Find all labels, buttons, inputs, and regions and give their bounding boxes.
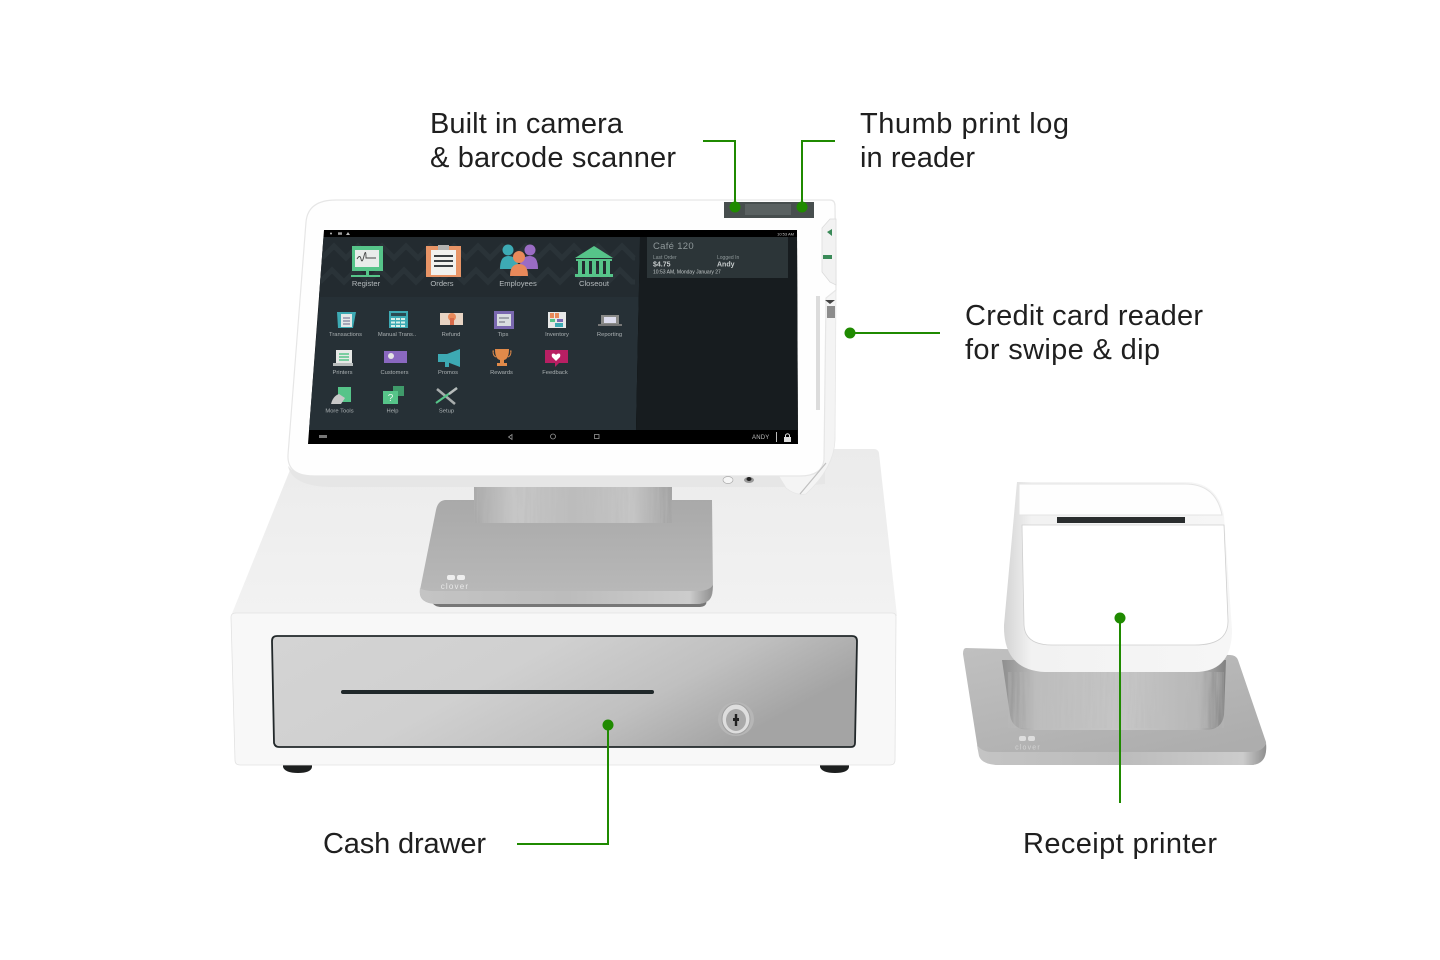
label: Credit card reader — [965, 300, 1203, 332]
info card: Andy — [717, 262, 735, 268]
callout: camera and barcode scanner — [430, 108, 740, 212]
printer white front — [1022, 525, 1228, 645]
app icon: reporting: Reporting — [597, 332, 622, 338]
drawer top surface — [231, 449, 897, 616]
app icon: register — [351, 246, 383, 288]
stand logo: clover — [441, 582, 469, 591]
right panel — [636, 237, 798, 430]
side buttons and reader slot — [800, 219, 836, 494]
monitor — [288, 200, 836, 494]
app icon: rewards — [490, 349, 513, 376]
app icon: feedback — [542, 350, 568, 376]
info card — [647, 237, 788, 278]
stand shadow — [432, 600, 706, 607]
status bar text — [330, 232, 794, 236]
leader line — [517, 720, 614, 844]
app icon: manual transaction — [378, 311, 417, 338]
app icon: setup: Setup — [439, 408, 454, 414]
app icon: more tools: More Tools — [325, 408, 354, 414]
navigation bar: ANDY — [752, 435, 769, 441]
app icon: reporting — [597, 315, 622, 338]
printer plate edge — [977, 744, 1266, 765]
callout: credit card reader — [844, 300, 1203, 366]
label: Built in camera — [430, 108, 624, 140]
stand logo — [441, 575, 469, 591]
app icon: employees — [499, 244, 538, 288]
monitor stand — [420, 480, 713, 607]
app icon: setup — [436, 388, 457, 414]
app icon: help: Help — [387, 408, 398, 414]
leader line — [703, 141, 740, 212]
label: & barcode scanner — [430, 142, 676, 174]
app icon: register: Register — [352, 279, 381, 288]
app icon: transactions — [329, 312, 362, 338]
screen — [308, 230, 798, 444]
stand front edge — [420, 585, 713, 604]
app icon: help: ? — [388, 393, 394, 404]
callout: thumb print reader — [796, 108, 1069, 212]
app icon: closeout: Closeout — [579, 279, 610, 288]
leader line — [844, 328, 940, 338]
info card: Logged In — [717, 255, 739, 261]
left app panel — [309, 237, 640, 430]
drawer feet — [283, 762, 849, 773]
stand base — [420, 500, 713, 604]
app icon: refund: Refund — [442, 332, 460, 338]
monitor underside — [288, 466, 825, 487]
leader line — [796, 141, 835, 212]
printer plate logo: clover — [1015, 744, 1041, 752]
app icon: closeout — [575, 246, 613, 288]
app icon: help — [383, 386, 404, 414]
power and headphone ports — [723, 476, 754, 484]
printer plate logo — [1015, 736, 1041, 752]
label: in reader — [860, 142, 975, 174]
side card reader housing — [775, 290, 836, 494]
callout: cash drawer — [323, 720, 614, 860]
drawer slot — [341, 690, 654, 694]
drawer front — [231, 613, 896, 765]
camera and scanner bar — [724, 202, 814, 218]
printer white body — [1004, 482, 1232, 672]
app icon: feedback: Feedback — [542, 370, 568, 376]
screen frame — [308, 230, 798, 444]
printer base plate — [963, 648, 1266, 765]
app icon: transactions: Transactions — [329, 332, 362, 338]
app icon: rewards: Rewards — [490, 370, 513, 376]
app icon: orders: Orders — [430, 279, 454, 288]
navigation bar — [319, 432, 791, 442]
label: Receipt printer — [1023, 828, 1217, 860]
label: for swipe & dip — [965, 334, 1160, 366]
drawer lock — [718, 702, 754, 736]
app icon: refund — [440, 313, 463, 338]
app icon: orders — [426, 245, 461, 288]
app icon: printers: Printers — [333, 370, 353, 376]
app icon: promos: Promos — [438, 370, 458, 376]
printer paper slot — [1057, 517, 1185, 523]
app icon: promos — [438, 349, 460, 376]
app icon: customers — [380, 351, 409, 376]
info card: 10:53 AM, Monday January 27 — [653, 270, 721, 276]
printer metal body — [1002, 660, 1226, 730]
app icon: employees: Employees — [499, 279, 537, 288]
leader line — [1114, 612, 1126, 803]
app icon: manual transaction: Manual Trans.. — [378, 332, 417, 338]
stand neck — [474, 480, 672, 524]
app icon: customers: Customers — [380, 370, 409, 376]
monitor body — [288, 200, 836, 476]
callout: receipt printer — [1023, 612, 1217, 860]
info card: Café 120 — [653, 241, 694, 252]
app icon: printers — [333, 350, 353, 376]
label: Thumb print log — [860, 108, 1069, 140]
hero band pattern — [319, 237, 640, 297]
app icon: more tools — [325, 387, 354, 414]
cash drawer — [231, 449, 897, 773]
label: Cash drawer — [323, 828, 486, 860]
app icon: inventory — [545, 312, 569, 338]
status bar text: 10:53 AM — [777, 232, 794, 236]
app icon: tips — [494, 311, 514, 338]
info card: Last Order — [653, 255, 677, 261]
printer lid — [1019, 484, 1222, 515]
drawer steel panel — [272, 636, 857, 747]
receipt printer — [963, 482, 1266, 765]
info card: $4.75 — [653, 262, 671, 268]
app icon: tips: Tips — [498, 332, 508, 338]
app icon: inventory: Inventory — [545, 332, 569, 338]
